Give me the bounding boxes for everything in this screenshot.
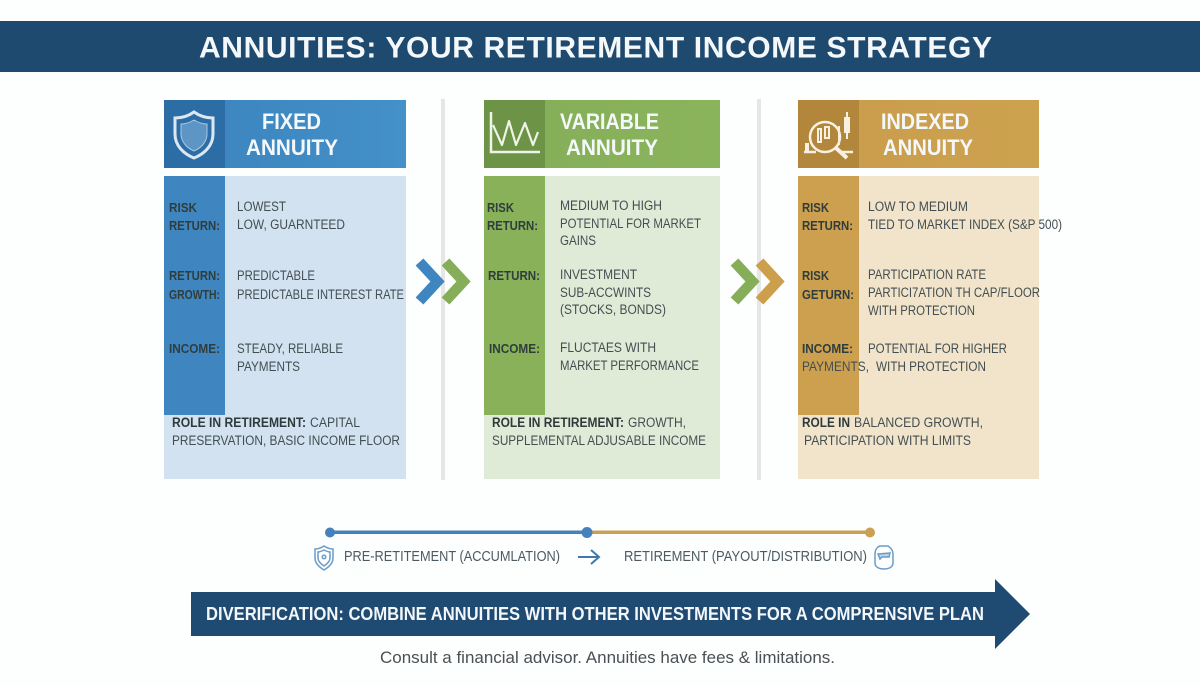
fixed annuity details: RETURN: (169, 218, 220, 233)
panel: indexed annuity (798, 100, 1062, 479)
panel: variable annuity (484, 100, 720, 479)
variable annuity details: GROWTH, (628, 415, 686, 430)
icon: small jar (875, 546, 893, 569)
indexed annuity details: RISK (802, 268, 830, 283)
diversification arrow banner (191, 579, 1030, 649)
indexed annuity header (798, 100, 1039, 168)
variable annuity details: SUB-ACCWINTS (560, 285, 651, 300)
footer disclaimer: Consult a financial advisor. Annuities have fees & limitations. (380, 649, 835, 667)
indexed annuity details: PARTICIPATION WITH LIMITS (804, 433, 971, 448)
arrows: variable to indexed chevrons (734, 262, 778, 301)
variable annuity details: INVESTMENT (560, 267, 637, 282)
diversification arrow banner: DIVERIFICATION: COMBINE ANNUITIES WITH OTHER INVESTMENTS FOR A COMPRENSIVE PLAN (206, 604, 984, 624)
icon: shield (175, 112, 213, 158)
variable annuity details (484, 176, 720, 479)
pre-retirement label: PRE-RETITEMENT (ACCUMLATION) (344, 549, 560, 565)
indexed annuity details: RETURN: (802, 218, 853, 233)
indexed annuity details: RISK (802, 200, 830, 215)
indexed annuity details: ROLE IN (802, 415, 850, 430)
indexed annuity details: WITH PROTECTION (876, 359, 986, 374)
fixed annuity details: INCOME: (169, 341, 220, 356)
indexed annuity details: POTENTIAL FOR HIGHER (868, 341, 1007, 356)
fixed annuity header (164, 100, 406, 168)
variable annuity details: MARKET PERFORMANCE (560, 358, 699, 373)
variable annuity details: INCOME: (489, 341, 540, 356)
retirement label: RETIREMENT (PAYOUT/DISTRIBUTION) (624, 549, 867, 565)
fixed annuity details: STEADY, RELIABLE (237, 341, 343, 356)
title banner (0, 21, 1200, 72)
indexed annuity details: BALANCED GROWTH, (854, 415, 983, 430)
indexed annuity details: PARTICIPATION RATE (868, 267, 986, 282)
fixed annuity header: FIXED (262, 109, 321, 134)
arrow: pre-retirement to retirement (578, 550, 599, 564)
indexed annuity header: ANNUITY (883, 135, 973, 160)
fixed annuity details: PRESERVATION, BASIC INCOME FLOOR (172, 433, 400, 448)
fixed annuity details: PREDICTABLE (237, 268, 315, 283)
icon: magnifier with candlesticks (804, 112, 853, 158)
fixed annuity details: RETURN: (169, 268, 220, 283)
panel: fixed annuity (164, 100, 406, 479)
variable annuity header (484, 100, 720, 168)
variable annuity details: FLUCTAES WITH (560, 340, 656, 355)
fixed annuity details: PAYMENTS (237, 359, 300, 374)
icon: market line chart (491, 112, 540, 152)
variable annuity details: RETURN: (488, 268, 540, 283)
fixed annuity details: CAPITAL (310, 415, 360, 430)
variable annuity header: VARIABLE (560, 109, 659, 134)
variable annuity details: SUPPLEMENTAL ADJUSABLE INCOME (492, 433, 706, 448)
indexed annuity details: PAYMENTS, (802, 359, 869, 374)
variable annuity details: (STOCKS, BONDS) (560, 302, 666, 317)
indexed annuity details: GETURN: (802, 287, 854, 302)
indexed annuity details (798, 176, 1062, 479)
fixed annuity details: PREDICTABLE INTEREST RATE (237, 287, 404, 302)
fixed annuity header: ANNUITY (246, 135, 338, 160)
variable annuity details: RISK (487, 200, 515, 215)
variable annuity details: POTENTIAL FOR MARKET (560, 216, 701, 231)
variable annuity details: MEDIUM TO HIGH (560, 198, 662, 213)
icon: small shield (315, 546, 333, 570)
fixed annuity details: ROLE IN RETIREMENT: (172, 415, 306, 430)
title banner: ANNUITIES: YOUR RETIREMENT INCOME STRATEGY (199, 32, 992, 64)
variable annuity header: ANNUITY (566, 135, 658, 160)
indexed annuity details: PARTICI7ATION TH CAP/FLOOR (868, 285, 1040, 300)
variable annuity details: RETURN: (487, 218, 538, 233)
variable annuity details: GAINS (560, 233, 596, 248)
fixed annuity details: GROWTH: (169, 287, 220, 302)
indexed annuity details: INCOME: (802, 341, 853, 356)
fixed annuity details: LOW, GUARNTEED (237, 217, 345, 232)
indexed annuity details: TIED TO MARKET INDEX (S&P 500) (868, 217, 1062, 232)
indexed annuity header: INDEXED (881, 109, 969, 134)
variable annuity details: ROLE IN RETIREMENT: (492, 415, 624, 430)
fixed annuity details (164, 176, 406, 479)
arrows: fixed to variable chevrons (420, 262, 464, 301)
indexed annuity details: WITH PROTECTION (868, 303, 975, 318)
timeline (315, 527, 893, 570)
indexed annuity details: LOW TO MEDIUM (868, 199, 968, 214)
fixed annuity details: LOWEST (237, 199, 286, 214)
fixed annuity details: RISK (169, 200, 198, 215)
